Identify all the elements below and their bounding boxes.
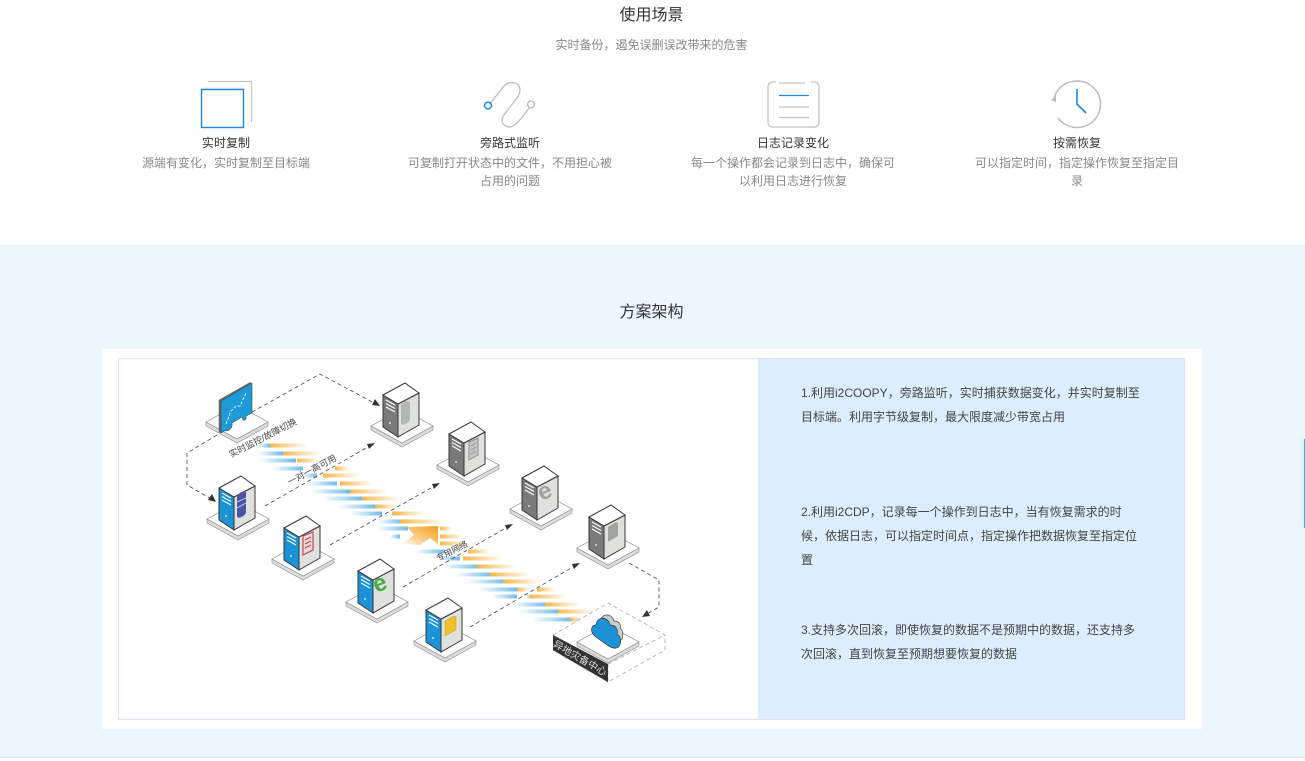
scenario name 2: 旁路式监听	[480, 136, 540, 150]
label: one to one HA: 一对一高可用	[285, 452, 338, 487]
scenario text 4	[975, 156, 1179, 188]
scenario name 4: 按需恢复	[1053, 136, 1101, 150]
text block: point 3: 次回滚，直到恢复至预期想要恢复的数据	[801, 647, 1017, 661]
server: primary web	[346, 559, 408, 623]
server: backup web: e	[534, 477, 556, 507]
icon: real-time replication	[200, 80, 252, 128]
scenario text 2: 可复制打开状态中的文件，不用担心被	[408, 156, 612, 170]
scenario text 2: 占用的问题	[480, 174, 540, 188]
scenario text 3: 每一个操作都会记录到日志中，确保可	[691, 156, 895, 170]
disaster recovery center	[551, 603, 665, 682]
text block: point 3: 3.支持多次回滚，即使恢复的数据不是预期中的数据，还支持多	[801, 623, 1135, 637]
scenario name 1: 实时复制	[202, 136, 250, 150]
disaster recovery center: 异地灾备中心	[551, 637, 609, 679]
server: primary database	[207, 476, 269, 540]
dashed link: monitor to both servers	[187, 374, 376, 500]
section background: architecture	[0, 245, 1305, 758]
text block: point 2: 置	[801, 553, 813, 567]
scenario text 2	[408, 156, 612, 188]
label: dedicated network: 专用网络	[435, 539, 470, 563]
server: primary documents	[272, 516, 334, 580]
scenario text 4: 录	[1071, 174, 1083, 188]
scenario text 4: 可以指定时间，指定操作恢复至指定目	[975, 156, 1179, 170]
monitor on plate	[206, 382, 268, 443]
data stripes	[258, 444, 593, 622]
server: primary files	[414, 598, 476, 662]
arrowheads	[367, 443, 650, 617]
server: backup web	[510, 466, 572, 530]
icon: log records	[767, 81, 820, 128]
panel: inner border	[118, 358, 1185, 720]
arrowhead: monitor to backup	[372, 399, 380, 406]
side tab	[1304, 439, 1305, 528]
architecture diagram	[186, 374, 666, 682]
text block: point 1: 1.利用i2COOPY，旁路监听，实时捕获数据变化，并实时复制至	[801, 386, 1140, 400]
big orange arrow	[402, 526, 438, 545]
title: usage scenarios: 使用场景	[619, 7, 684, 24]
server: backup documents	[437, 422, 499, 486]
icon: bypass listening	[484, 82, 535, 128]
scenario text 3: 以利用日志进行恢复	[739, 174, 847, 188]
title: solution architecture: 方案架构	[619, 304, 684, 321]
icon: clock restore	[1051, 80, 1102, 128]
server: primary web: e	[369, 569, 391, 599]
panel: description background	[758, 359, 1184, 719]
arrowhead: monitor to primary	[208, 494, 216, 502]
text block: point 3	[801, 623, 1135, 661]
text block: point 2	[801, 505, 1137, 567]
text block: point 1	[801, 386, 1140, 424]
label: monitoring and failover: 实时监控/故障切换	[227, 416, 298, 459]
scenario name 3: 日志记录变化	[757, 136, 829, 150]
panel: architecture card	[102, 349, 1202, 729]
text block: point 1: 目标端。利用字节级复制，最大限度减少带宽占用	[801, 410, 1065, 424]
scenario text 3	[691, 156, 895, 188]
text block: point 2: 候，依据日志，可以指定时间点，指定操作把数据恢复至指定位	[801, 529, 1137, 543]
server: backup database	[371, 383, 433, 447]
server: backup files	[577, 505, 639, 569]
text block: point 2: 2.利用i2CDP，记录每一个操作到日志中，当有恢复需求的时	[801, 505, 1122, 519]
scenario text 1: 源端有变化，实时复制至目标端	[142, 156, 310, 170]
subtitle: 实时备份，遏免误删误改带来的危害	[555, 38, 748, 52]
dashed link: server to server	[265, 444, 659, 627]
